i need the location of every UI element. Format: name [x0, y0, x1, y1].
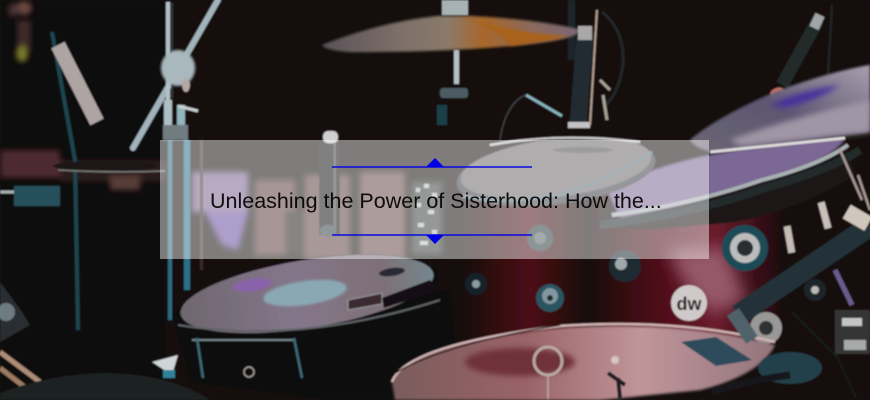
bottom drum head	[392, 324, 775, 400]
dw logo badge: dw	[676, 294, 702, 314]
left cymbal edge and box	[0, 161, 165, 206]
dw logo badge	[671, 285, 707, 321]
left microphone and stand	[52, 32, 97, 330]
blurred purple and pink shapes behind the title panel	[192, 172, 405, 260]
left object and drumsticks	[0, 282, 40, 388]
right crash cymbal	[690, 65, 870, 152]
bottom divider line with down-pointing triangle	[332, 234, 532, 244]
cymbal stand with boom arm	[133, 0, 218, 320]
right tom with purple head	[597, 138, 870, 230]
title text: Unleashing the Power of Sisterhood: How the...	[210, 189, 662, 213]
background stage lights	[8, 1, 32, 62]
centre tom with pale head	[453, 128, 659, 216]
centre microphone	[568, 10, 623, 128]
top divider line with up-pointing triangle	[332, 158, 532, 168]
upper right microphone	[769, 5, 832, 98]
stand behind centre	[412, 0, 575, 254]
background pink band	[0, 150, 165, 190]
drum lugs and dw badge	[465, 225, 782, 344]
small white mic clip	[319, 131, 340, 237]
top centre cymbal	[322, 0, 583, 52]
snare drum left	[152, 239, 460, 400]
right side microphone and hardware	[712, 201, 870, 398]
translucent title panel	[160, 140, 709, 259]
dark drum throne	[0, 373, 210, 400]
red drum shell	[460, 195, 780, 340]
